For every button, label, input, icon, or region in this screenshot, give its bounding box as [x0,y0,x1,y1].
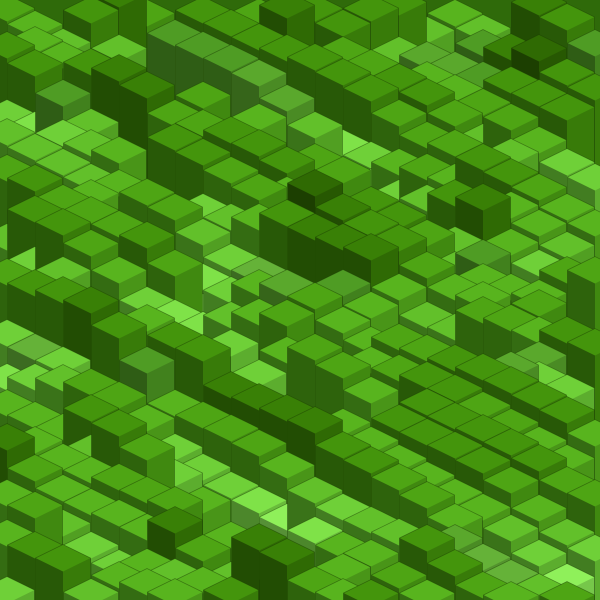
column x35 [7,10,63,600]
column x399 [371,0,427,600]
column x91 [63,0,119,600]
column x427 [399,16,455,600]
column x175 [147,20,203,600]
column x287 [259,0,315,600]
column x315 [287,0,343,600]
column x343 [315,10,371,600]
column x483 [455,14,511,600]
column x203 [175,0,231,600]
column x511 [483,34,539,600]
column x147 [119,0,175,600]
column x567 [539,3,595,600]
column x455 [427,0,483,600]
column x539 [511,0,567,600]
column x595 [567,29,600,600]
column x63 [35,28,91,600]
column x371 [343,0,399,600]
column x119 [91,0,147,600]
column x7 [0,0,35,600]
column x231 [203,9,259,600]
column x259 [231,0,287,600]
